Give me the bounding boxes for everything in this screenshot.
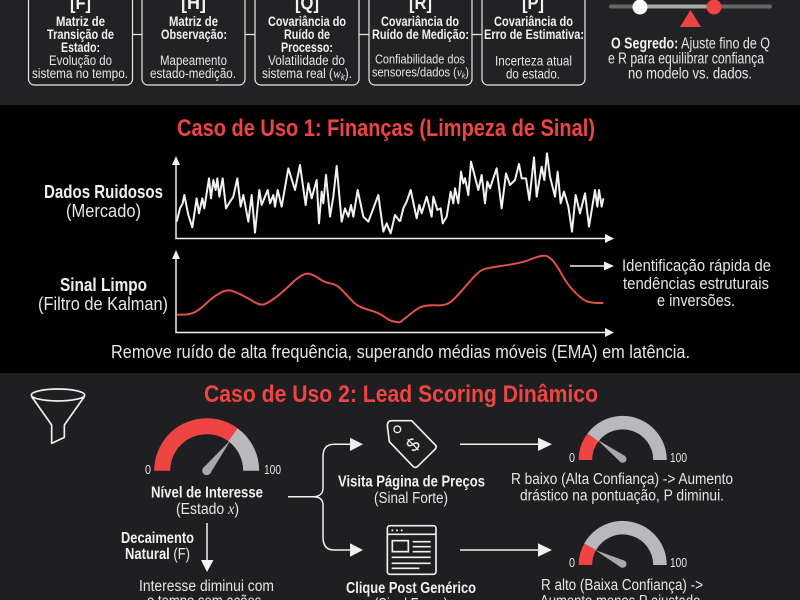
label: clean signal: (Filtro de Kalman) [38, 294, 168, 314]
card: F: Transição de [47, 27, 114, 42]
text: the secret: O Segredo: Ajuste fino de Q [611, 36, 770, 52]
label: pricing page visit: (Sinal Forte) [374, 490, 448, 507]
text: finance summary: Remove ruído de alta frequência, superando médias móveis (EMA) em latência. [111, 342, 690, 362]
arrows: branching to signals [288, 438, 363, 557]
card: Q: k [341, 72, 345, 82]
label: clean signal [38, 275, 168, 314]
card: Q: ). [345, 66, 352, 81]
card: H: estado-medição. [150, 66, 236, 81]
text: low R result [511, 471, 733, 504]
card: P: Covariância do [494, 14, 573, 29]
card: R: sensores/dados (v [372, 66, 468, 80]
text: the secret: no modelo vs. dados. [628, 66, 752, 82]
card: Q: Volatilidade do [268, 53, 345, 68]
panel: matrix cards [28, 0, 585, 85]
card: P: do estado. [506, 66, 560, 82]
card: F: sistema no tempo. [32, 66, 128, 81]
card: H: Matriz de [169, 14, 218, 29]
gauge: interest level: 0 [145, 462, 151, 477]
chart: noisy market data [172, 153, 614, 243]
card: H: Mapeamento [160, 53, 227, 68]
text: high R result [540, 577, 704, 600]
panel: lead scoring background [0, 373, 800, 600]
card: F [28, 0, 132, 85]
gauge: high R: 100 [670, 555, 687, 570]
label: natural decay [121, 530, 194, 563]
card: R: Ruído de Medição: [372, 27, 469, 42]
card: P [482, 0, 585, 85]
label: pricing page visit: Visita Página de Preços [338, 474, 485, 491]
card: F: Estado: [61, 40, 100, 55]
card: R: ) [465, 66, 469, 80]
label: generic post click: Clique Post Genérico [346, 580, 476, 597]
text: interest decay note: Interesse diminui com [139, 578, 274, 595]
label: pricing page visit [338, 474, 485, 507]
label: interest level [151, 484, 263, 518]
gauge: interest level [145, 426, 281, 477]
label: clean signal: Sinal Limpo [60, 275, 147, 295]
arrow: to trend identification [570, 262, 614, 270]
label: natural decay: Natural (F) [125, 546, 190, 563]
card: H: Observação: [161, 27, 227, 42]
gauge: low R: 100 [670, 450, 687, 465]
card: R [369, 0, 472, 85]
text: low R result: R baixo (Alta Confiança) -> Aumento [511, 471, 733, 488]
arrow: decay [201, 523, 214, 572]
card: Q: Processo: [281, 40, 333, 55]
panel: finance background [0, 105, 800, 373]
card: R: k [462, 72, 466, 80]
card: R: Covariância do [381, 14, 459, 29]
text: trend identification: e inversões. [657, 292, 735, 310]
text: trend identification [622, 257, 771, 310]
gauge: high R [569, 528, 687, 570]
icon: funnel [31, 389, 85, 443]
label: interest level: (Estado x) [176, 501, 239, 518]
balance slider icon [609, 0, 772, 27]
panel: top background [0, 0, 800, 105]
text: low R result: drástico na pontuação, P diminui. [520, 488, 724, 504]
text: high R result: R alto (Baixa Confiança) -> [541, 577, 703, 594]
gauge: interest level: 100 [264, 462, 281, 477]
card: Q: Ruído de [284, 27, 330, 42]
card: P: Erro de Estimativa: [484, 27, 584, 42]
card: F: Evolução do [49, 53, 112, 68]
heading: use case 2: Caso de Uso 2: Lead Scoring Dinâmico [204, 381, 598, 408]
gauge: low R [569, 423, 687, 465]
chart: Kalman clean signal [172, 250, 614, 337]
label: noisy data [44, 182, 163, 221]
gauge: low R: 0 [569, 450, 575, 465]
card: H [142, 0, 245, 85]
card: P: Incerteza atual [495, 54, 572, 68]
icon: price tag: $ [403, 434, 425, 457]
card: Q [255, 0, 359, 85]
arrow: strong signal to gauge [460, 438, 552, 451]
label: noisy data: Dados Ruidosos [44, 182, 163, 202]
card: Q: Covariância do [268, 14, 346, 29]
icon: price tag [387, 421, 436, 467]
text: the secret [608, 36, 770, 82]
text: trend identification: Identificação rápida de [622, 257, 771, 275]
text: trend identification: tendências estruturais [623, 275, 769, 293]
arrow: weak signal to gauge [460, 543, 552, 557]
label: interest level: Nível de Interesse [151, 484, 263, 502]
card: F: Matriz de [56, 14, 105, 29]
card: R: Confiabilidade dos [375, 52, 465, 66]
gauge: high R: 0 [569, 555, 575, 570]
icon: web page [387, 526, 436, 574]
heading: use case 1: Caso de Uso 1: Finanças (Limpeza de Sinal) [177, 115, 595, 142]
card: Q: sistema real (w [262, 66, 343, 81]
label: noisy data: (Mercado) [66, 201, 141, 221]
label: natural decay: Decaimento [121, 530, 194, 547]
